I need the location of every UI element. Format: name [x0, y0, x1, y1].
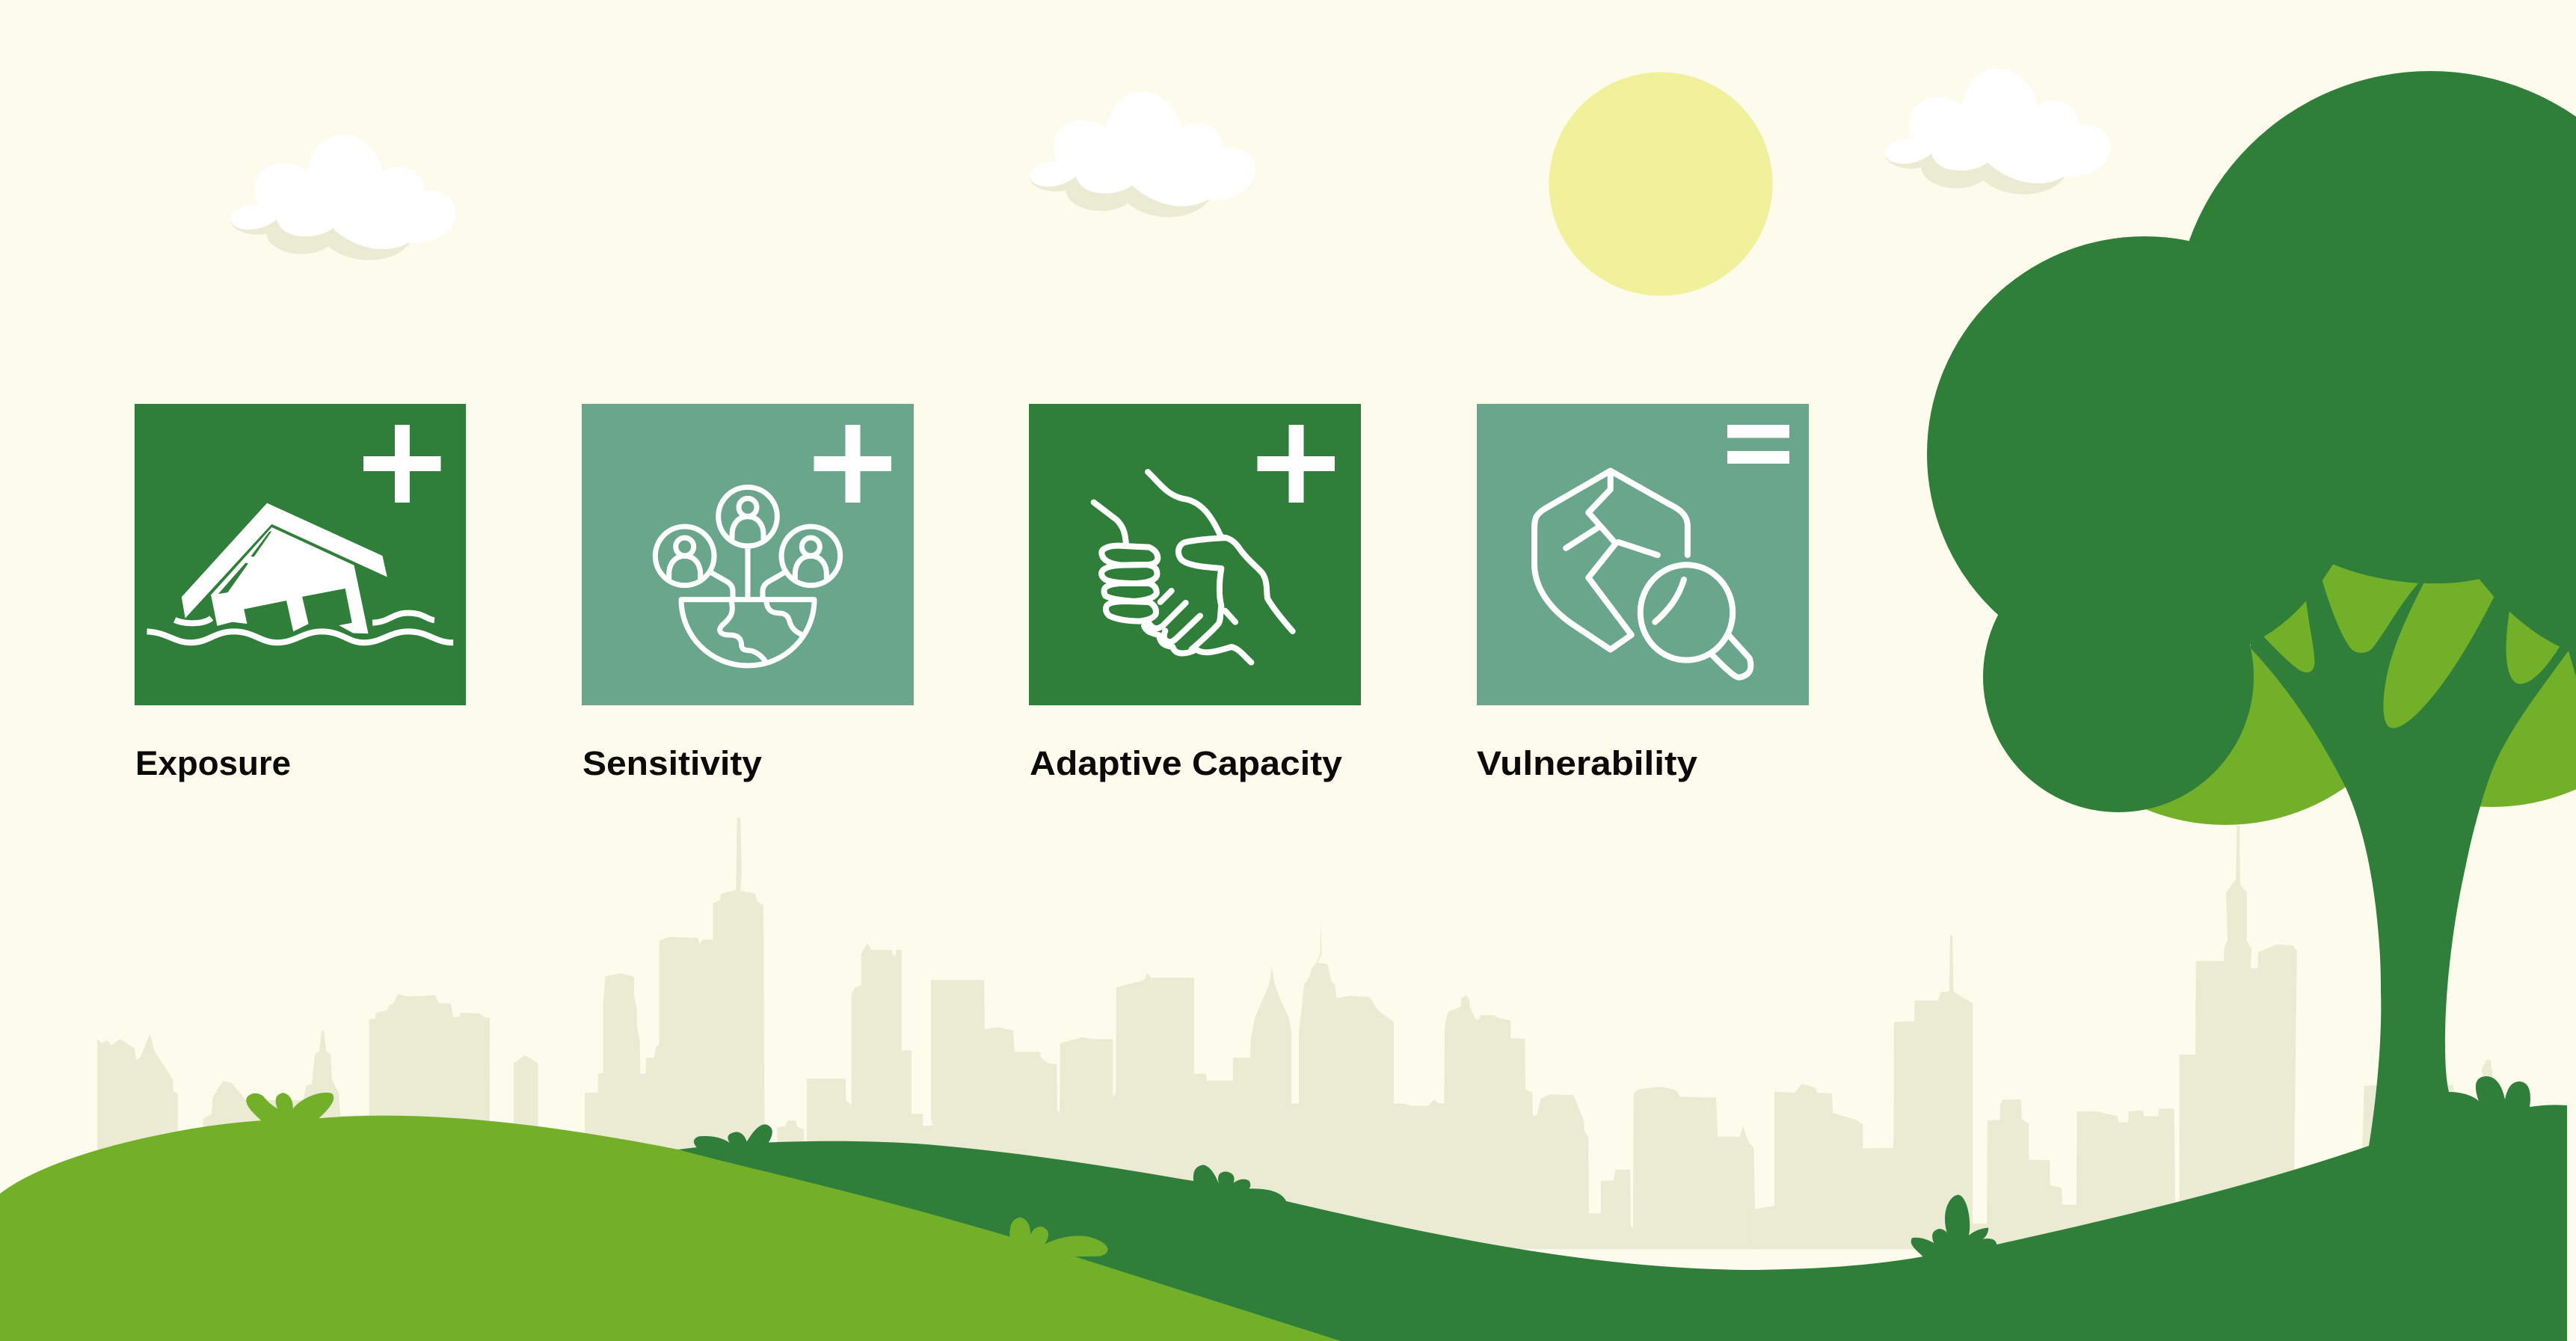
icon: helping hands — [1094, 472, 1293, 663]
light green hill — [0, 1116, 1341, 1341]
card: Adaptive Capacity — [1029, 404, 1361, 782]
bush: dark, on hill right — [1911, 1194, 1996, 1265]
plus sign — [814, 425, 891, 503]
sun — [1549, 72, 1772, 296]
equals sign — [1727, 425, 1789, 464]
bush: dark, on hill middle — [1193, 1164, 1286, 1219]
label: Adaptive Capacity: Adaptive Capacity — [1030, 744, 1343, 782]
icon: flooded house — [147, 503, 453, 642]
bush: dark, on dark hill left — [694, 1124, 772, 1158]
label: Exposure: Exposure — [135, 744, 291, 782]
bush: light, top of hill — [246, 1093, 333, 1127]
card: Vulnerability — [1477, 404, 1809, 782]
tree: dark green canopy — [1927, 71, 2576, 812]
plus sign — [363, 425, 441, 503]
tree: light green canopy behind — [2015, 385, 2576, 825]
label: Sensitivity: Sensitivity — [582, 744, 763, 782]
tree trunk and dark hill — [678, 524, 2576, 1341]
label: Vulnerability: Vulnerability — [1477, 744, 1698, 782]
tree: light leaves between branches — [2263, 564, 2560, 728]
card: Exposure — [135, 404, 466, 782]
icon: people and globe — [655, 487, 840, 666]
city skyline silhouette — [97, 818, 2494, 1284]
bush: light, on slope — [1009, 1217, 1107, 1263]
tree — [678, 71, 2576, 1341]
cloud: middle — [1030, 91, 1255, 217]
cloud: left — [230, 135, 455, 260]
icon: shield with magnifier — [1534, 471, 1750, 678]
card: Sensitivity — [582, 404, 914, 782]
cloud: right — [1885, 69, 2110, 194]
plus sign — [1258, 425, 1335, 503]
